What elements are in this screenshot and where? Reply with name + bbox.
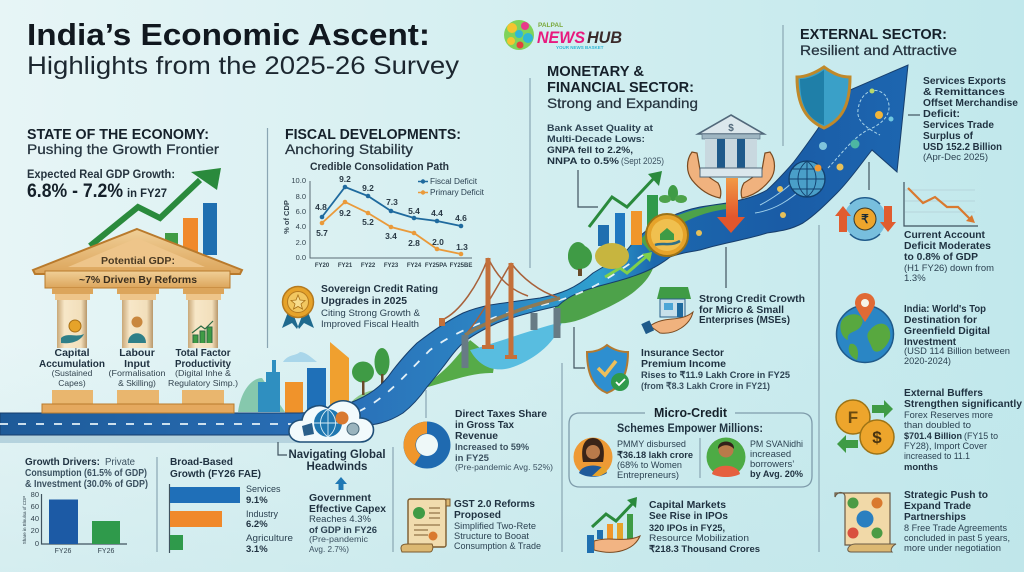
line chart: credible consolidation path: 5.4 xyxy=(408,206,420,216)
micro-credit heading: Micro-Credit xyxy=(654,405,728,420)
heading: monetary and financial: MONETARY & xyxy=(547,64,645,80)
line chart: credible consolidation path: 6.0 xyxy=(296,207,306,216)
direct taxes text: Increased to 59% xyxy=(455,442,530,453)
GST reforms text: Simplified Two-Rete xyxy=(454,521,536,532)
line chart: credible consolidation path: Fiscal Deficit xyxy=(430,177,478,186)
services exports text: Services Exports xyxy=(923,75,1006,87)
logo: Palpal News Hub: NEWS xyxy=(537,28,586,47)
government capex xyxy=(309,492,386,554)
capital markets text xyxy=(649,499,760,555)
line chart: credible consolidation path: 1.3 xyxy=(456,242,468,252)
heading: fiscal developments xyxy=(285,127,461,157)
panel: monetary and financial sector xyxy=(547,64,805,393)
insurance text: Insurance Sector xyxy=(641,347,724,359)
bar chart: share of GDP: 60 xyxy=(31,502,39,511)
heading: external sector: Resilient and Attractive xyxy=(800,42,957,58)
external buffers text xyxy=(904,387,1022,473)
services exports text: Services Trade xyxy=(923,119,994,131)
bar chart: share of GDP: FY26 xyxy=(98,548,114,555)
icon: bank in hands with down arrow: $ xyxy=(728,123,734,134)
bank asset quality text: Bank Asset Quality at xyxy=(547,123,654,134)
logo: Palpal News Hub: HUB xyxy=(587,28,622,47)
pillar labels: Labour xyxy=(119,347,155,359)
broad-based heading xyxy=(170,456,261,480)
icon: shield on arrow xyxy=(797,67,850,128)
trade partnerships text: Expand Trade xyxy=(904,500,971,512)
growth drivers text: Growth Drivers: xyxy=(25,456,100,468)
panel: fiscal developments xyxy=(282,127,485,330)
services exports text: Deficit: xyxy=(923,108,960,120)
heading: fiscal developments: Anchoring Stability xyxy=(285,141,413,157)
icon: currency coins exchange xyxy=(836,400,894,454)
line chart: credible consolidation path: 4.6 xyxy=(455,213,467,223)
direct taxes text: Revenue xyxy=(455,430,498,442)
capital markets text: Resource Mobilization xyxy=(649,533,749,544)
donut chart: direct taxes share xyxy=(404,422,450,468)
growth drivers text: Consumption (61.5% of GDP) xyxy=(25,468,147,479)
icon: capital markets hand and arrow xyxy=(587,497,640,553)
icon: trade scroll xyxy=(835,492,896,552)
sovereign rating text xyxy=(321,283,438,330)
government capex: Government xyxy=(309,492,371,504)
city skyline xyxy=(238,342,395,413)
icon: globe network on arrow xyxy=(789,88,894,197)
pillar labels: & Skilling) xyxy=(118,378,156,388)
current account text: to 0.8% of GDP xyxy=(904,251,978,263)
trade partnerships text xyxy=(904,489,1010,554)
direct taxes text: (Pre-pandemic Avg. 52%) xyxy=(455,463,553,472)
line chart: credible consolidation path: 2.0 xyxy=(432,237,444,247)
direct taxes text: in FY25 xyxy=(455,453,490,464)
temple: potential GDP xyxy=(33,229,242,413)
line chart: credible consolidation path: FY24 xyxy=(407,263,422,269)
capital markets text: Capital Markets xyxy=(649,499,726,511)
trade partnerships text: more under negotiation xyxy=(904,543,1001,554)
logo: Palpal News Hub xyxy=(504,20,622,50)
line chart: credible consolidation path xyxy=(282,161,485,269)
icon: rupee with arrows xyxy=(835,198,896,240)
line chart: credible consolidation path: FY25PA xyxy=(425,263,448,269)
heading: monetary and financial: FINANCIAL SECTOR: xyxy=(547,80,694,96)
current account text: (H1 FY26) down from xyxy=(904,263,994,274)
insurance text: (from ₹8.3 Lakh Crore in FY21) xyxy=(641,381,770,392)
line chart: credible consolidation path: 10.0 xyxy=(291,176,306,185)
line chart: credible consolidation path: Credible Consolidation Path xyxy=(310,161,449,173)
GST reforms text xyxy=(454,498,541,552)
sovereign rating text: Citing Strong Growth & xyxy=(321,308,421,319)
line chart: credible consolidation path: 4.4 xyxy=(431,208,443,218)
trade partnerships text: concluded in past 5 years, xyxy=(904,533,1010,544)
PM SVANidhi text: by Avg. 20% xyxy=(750,469,804,480)
title: India’s Economic Ascent: xyxy=(27,17,430,52)
GST reforms text: GST 2.0 Reforms xyxy=(454,498,535,510)
temple: potential GDP: ~7% Driven By Reforms xyxy=(79,274,197,286)
line chart: credible consolidation path: FY25BE xyxy=(450,263,472,269)
heading: state of the economy xyxy=(27,127,219,157)
GST reforms text: Structure to Booat xyxy=(454,531,529,542)
connector: credit growth xyxy=(725,247,727,288)
line chart: credible consolidation path: FY23 xyxy=(384,263,399,269)
greenfield text: Destination for xyxy=(904,314,977,326)
icon: currency coins exchange: F xyxy=(848,408,858,427)
line chart: credible consolidation path: 2.0 xyxy=(296,238,306,247)
GDP growth stat xyxy=(27,167,175,202)
heading: state of the economy: STATE OF THE ECONOMY: xyxy=(27,127,209,143)
horizontal bar chart by sector: 6.2% xyxy=(246,519,268,530)
micro-credit heading: Schemes Empower Millions: xyxy=(617,421,763,435)
current account text: Current Account xyxy=(904,229,985,241)
broad-based heading: Broad-Based xyxy=(170,456,233,468)
line chart: credible consolidation path: FY22 xyxy=(361,263,376,269)
broad-based heading: Growth (FY26 FAE) xyxy=(170,468,261,480)
horizontal bar chart by sector: Industry xyxy=(246,509,279,519)
PMMY text: (68% to Women xyxy=(617,460,682,471)
panel: state of the economy xyxy=(27,127,242,413)
services exports text: & Remittances xyxy=(923,86,1005,98)
bar chart: share of GDP: 0 xyxy=(35,539,39,548)
sovereign rating text: Improved Fiscal Health xyxy=(321,319,419,330)
insurance text: Rises to ₹11.9 Lakh Crore in FY25 xyxy=(641,370,791,381)
line chart: credible consolidation path: 7.3 xyxy=(386,197,398,207)
growth drivers text xyxy=(25,456,148,490)
navigating headwinds callout: Headwinds xyxy=(306,459,368,473)
bank asset quality text: GNPA fell to 2.2%, xyxy=(547,145,633,156)
bank asset quality text xyxy=(547,123,664,167)
bar chart: share of GDP: FY26 xyxy=(55,548,71,555)
government capex: of GDP in FY26 xyxy=(309,525,377,536)
pillar labels: Productivity xyxy=(175,358,231,370)
ascending road ribbon xyxy=(0,65,908,443)
pillar labels xyxy=(39,347,238,388)
connector: bank quality xyxy=(578,170,598,207)
line chart: credible consolidation path: 3.4 xyxy=(385,231,397,241)
external buffers text: Forex Reserves more xyxy=(904,410,993,421)
GDP growth stat: 6.8% - 7.2% xyxy=(27,181,123,202)
GST reforms text: Consumption & Trade xyxy=(454,541,541,552)
greenfield text: Investment xyxy=(904,336,956,348)
greenfield text: Greenfield Digital xyxy=(904,325,990,337)
icon: GST document scroll xyxy=(401,499,450,552)
line chart: credible consolidation path: 9.2 xyxy=(362,183,374,193)
bar chart: share of GDP xyxy=(22,490,127,555)
line chart: credible consolidation path: 4.8 xyxy=(315,202,327,212)
navigating headwinds callout xyxy=(278,442,386,473)
sovereign rating text: Upgrades in 2025 xyxy=(321,295,407,307)
heading: external sector: EXTERNAL SECTOR: xyxy=(800,27,947,43)
external buffers text: months xyxy=(904,462,938,473)
credit growth text xyxy=(699,293,805,326)
greenfield text xyxy=(904,303,1010,367)
chart: current account deficit xyxy=(904,182,978,226)
line chart: credible consolidation path: 2.8 xyxy=(408,238,420,248)
title: Highlights from the 2025-26 Survey xyxy=(27,52,460,80)
panel: growth drivers xyxy=(22,456,148,555)
line chart: credible consolidation path: 0.0 xyxy=(296,253,306,262)
logo: Palpal News Hub: PALPAL xyxy=(538,22,563,29)
pillar labels: Capital xyxy=(54,347,90,359)
government capex: (Pre-pandemic xyxy=(309,534,369,544)
icon: globe with pin xyxy=(836,293,894,362)
external buffers text: than doubled to xyxy=(904,420,971,431)
sovereign rating text: Sovereign Credit Rating xyxy=(321,283,438,295)
chart icon: bars and growth arrow xyxy=(90,168,221,255)
PMMY text: Entrepreneurs) xyxy=(617,470,679,481)
bar chart: share of GDP: 80 xyxy=(31,490,39,499)
horizontal bar chart by sector: 9.1% xyxy=(246,495,268,506)
PM SVANidhi text: borrowers’ xyxy=(750,459,794,470)
credit growth text: Strong Credit Crowth xyxy=(699,293,805,305)
line chart: credible consolidation path: FY20 xyxy=(315,263,330,269)
PM SVANidhi text: increased xyxy=(750,449,791,460)
trade partnerships text: Strategic Push to xyxy=(904,489,988,501)
insurance text xyxy=(641,347,791,392)
title xyxy=(27,17,460,80)
services exports text xyxy=(908,75,1018,163)
capital markets text: 320 IPOs in FY25, xyxy=(649,523,725,534)
pillar labels: (Digital Inhe & xyxy=(175,368,231,378)
external buffers text: $701.4 Billion xyxy=(904,431,962,442)
government capex: Reaches 4.3% xyxy=(309,514,372,525)
PM SVANidhi text xyxy=(750,439,804,480)
line chart: credible consolidation path: 9.2 xyxy=(339,174,351,184)
line chart: credible consolidation path: % of CDP xyxy=(282,200,291,234)
portrait: woman xyxy=(574,438,612,477)
growth drivers text: & Investment (30.0% of GDP) xyxy=(25,479,148,490)
temple: potential GDP: Potential GDP: xyxy=(101,255,175,267)
trade partnerships text: 8 Free Trade Agreements xyxy=(904,523,1007,534)
pillar labels: (Formalisation xyxy=(108,368,166,378)
line chart: credible consolidation path: FY21 xyxy=(338,263,353,269)
heading: monetary and financial: Strong and Expanding xyxy=(547,95,698,111)
icon: insurance shield xyxy=(587,345,629,393)
bridge xyxy=(442,242,588,368)
services exports text: Offset Merchandise xyxy=(923,97,1018,109)
PMMY text: PMMY disbursed xyxy=(617,439,686,450)
current account text xyxy=(904,229,994,284)
external buffers text: FY28), Import Cover xyxy=(904,441,987,452)
line chart: credible consolidation path: 8.0 xyxy=(296,192,306,201)
connector: insurance xyxy=(574,327,585,368)
horizontal bar chart by sector: Services xyxy=(246,484,281,494)
pillar labels: Accumulation xyxy=(39,358,105,370)
bar chart: share of GDP: 40 xyxy=(31,514,39,523)
external buffers text: External Buffers xyxy=(904,387,983,399)
bar chart: share of GDP: Share in Blnulsa of CDP xyxy=(22,496,27,544)
panel: external sector xyxy=(789,27,1022,554)
heading: external sector xyxy=(800,27,957,58)
credit growth text: Enterprises (MSEs) xyxy=(699,314,790,326)
pillar labels: Regulatory Simp.) xyxy=(168,378,238,388)
direct taxes text: in Gross Tax xyxy=(455,419,514,431)
icon: store in hand xyxy=(641,287,693,334)
insurance text: Premium Income xyxy=(641,358,726,370)
PMMY text xyxy=(617,439,693,481)
bank asset quality text: Multi-Decade Lows: xyxy=(547,134,645,145)
GDP growth stat: in FY27 xyxy=(127,186,167,200)
portrait: man xyxy=(706,438,746,477)
external buffers text: Strengthen significantly xyxy=(904,398,1022,410)
trade partnerships text: Partnerships xyxy=(904,511,966,523)
pillar labels: Total Factor xyxy=(176,347,230,359)
current account text: Deficit Moderates xyxy=(904,240,991,252)
government capex: Avg. 2.7%) xyxy=(309,544,349,554)
line chart: credible consolidation path: Primary Deficit xyxy=(430,188,485,197)
navigating headwinds callout: Navigating Global xyxy=(288,447,386,461)
capital markets text: ₹218.3 Thousand Crores xyxy=(649,544,760,555)
icon: rupee with arrows: ₹ xyxy=(861,212,869,226)
pillar labels: (Sustained xyxy=(52,368,93,378)
greenfield text: 2020-2024) xyxy=(904,356,951,367)
icon: bank in hands with down arrow xyxy=(688,115,774,233)
horizontal bar chart by sector: 3.1% xyxy=(246,544,268,555)
line chart: credible consolidation path: 4.0 xyxy=(296,222,306,231)
logo: Palpal News Hub: YOUR NEWS BASKET xyxy=(556,45,604,50)
line chart: credible consolidation path: 9.2 xyxy=(339,208,351,218)
greenfield text: India: World's Top xyxy=(904,303,986,315)
horizontal bar chart by sector xyxy=(170,484,293,555)
bar chart: share of GDP: 20 xyxy=(31,526,39,535)
pillar labels: Input xyxy=(124,358,150,370)
current account text: 1.3% xyxy=(904,273,926,284)
connector: rupee xyxy=(868,162,870,190)
growth drivers text: Private xyxy=(105,457,135,468)
bank asset quality text: (Sept 2025) xyxy=(621,156,664,166)
icon: cloud with globe xyxy=(289,401,374,442)
heading: state of the economy: Pushing the Growth Frontier xyxy=(27,141,219,157)
PM SVANidhi text: PM SVANidhi xyxy=(750,439,803,450)
line chart: credible consolidation path: 5.7 xyxy=(316,228,328,238)
direct taxes text xyxy=(455,408,553,472)
GDP growth stat: Expected Real GDP Growth: xyxy=(27,167,175,181)
services exports text: (Apr-Dec 2025) xyxy=(923,152,988,163)
horizontal bar chart by sector: Agriculture xyxy=(246,533,293,543)
government capex: Effective Capex xyxy=(309,503,386,515)
panel: broad-based growth xyxy=(170,456,293,555)
panel: micro-credit xyxy=(569,405,812,487)
GST reforms text: Proposed xyxy=(454,509,501,521)
bank asset quality text: NNPA to 0.5% xyxy=(547,156,620,167)
icon: rating medal xyxy=(282,286,314,329)
greenfield text: (USD 114 Billion between xyxy=(904,346,1010,357)
heading: monetary and financial xyxy=(547,64,698,111)
icon: currency coins exchange: $ xyxy=(872,428,882,447)
services exports text: USD 152.2 Billion xyxy=(923,141,1002,153)
pillar labels: Capes) xyxy=(58,378,86,388)
services exports text: Surplus of xyxy=(923,130,973,142)
external buffers text: increased to 11.1 xyxy=(904,451,970,462)
capital markets text: See Rise in IPOs xyxy=(649,510,728,522)
external buffers text: (FY15 to xyxy=(964,431,998,442)
line chart: credible consolidation path: 5.2 xyxy=(362,217,374,227)
credit growth text: for Micro & Small xyxy=(699,304,784,316)
micro-credit heading xyxy=(617,405,763,435)
growth chart and coin xyxy=(568,171,688,276)
direct taxes text: Direct Taxes Share xyxy=(455,408,547,420)
heading: fiscal developments: FISCAL DEVELOPMENTS: xyxy=(285,127,461,143)
arrow: up to headwinds xyxy=(335,477,347,490)
PMMY text: ₹36.18 lakh crore xyxy=(617,450,693,461)
